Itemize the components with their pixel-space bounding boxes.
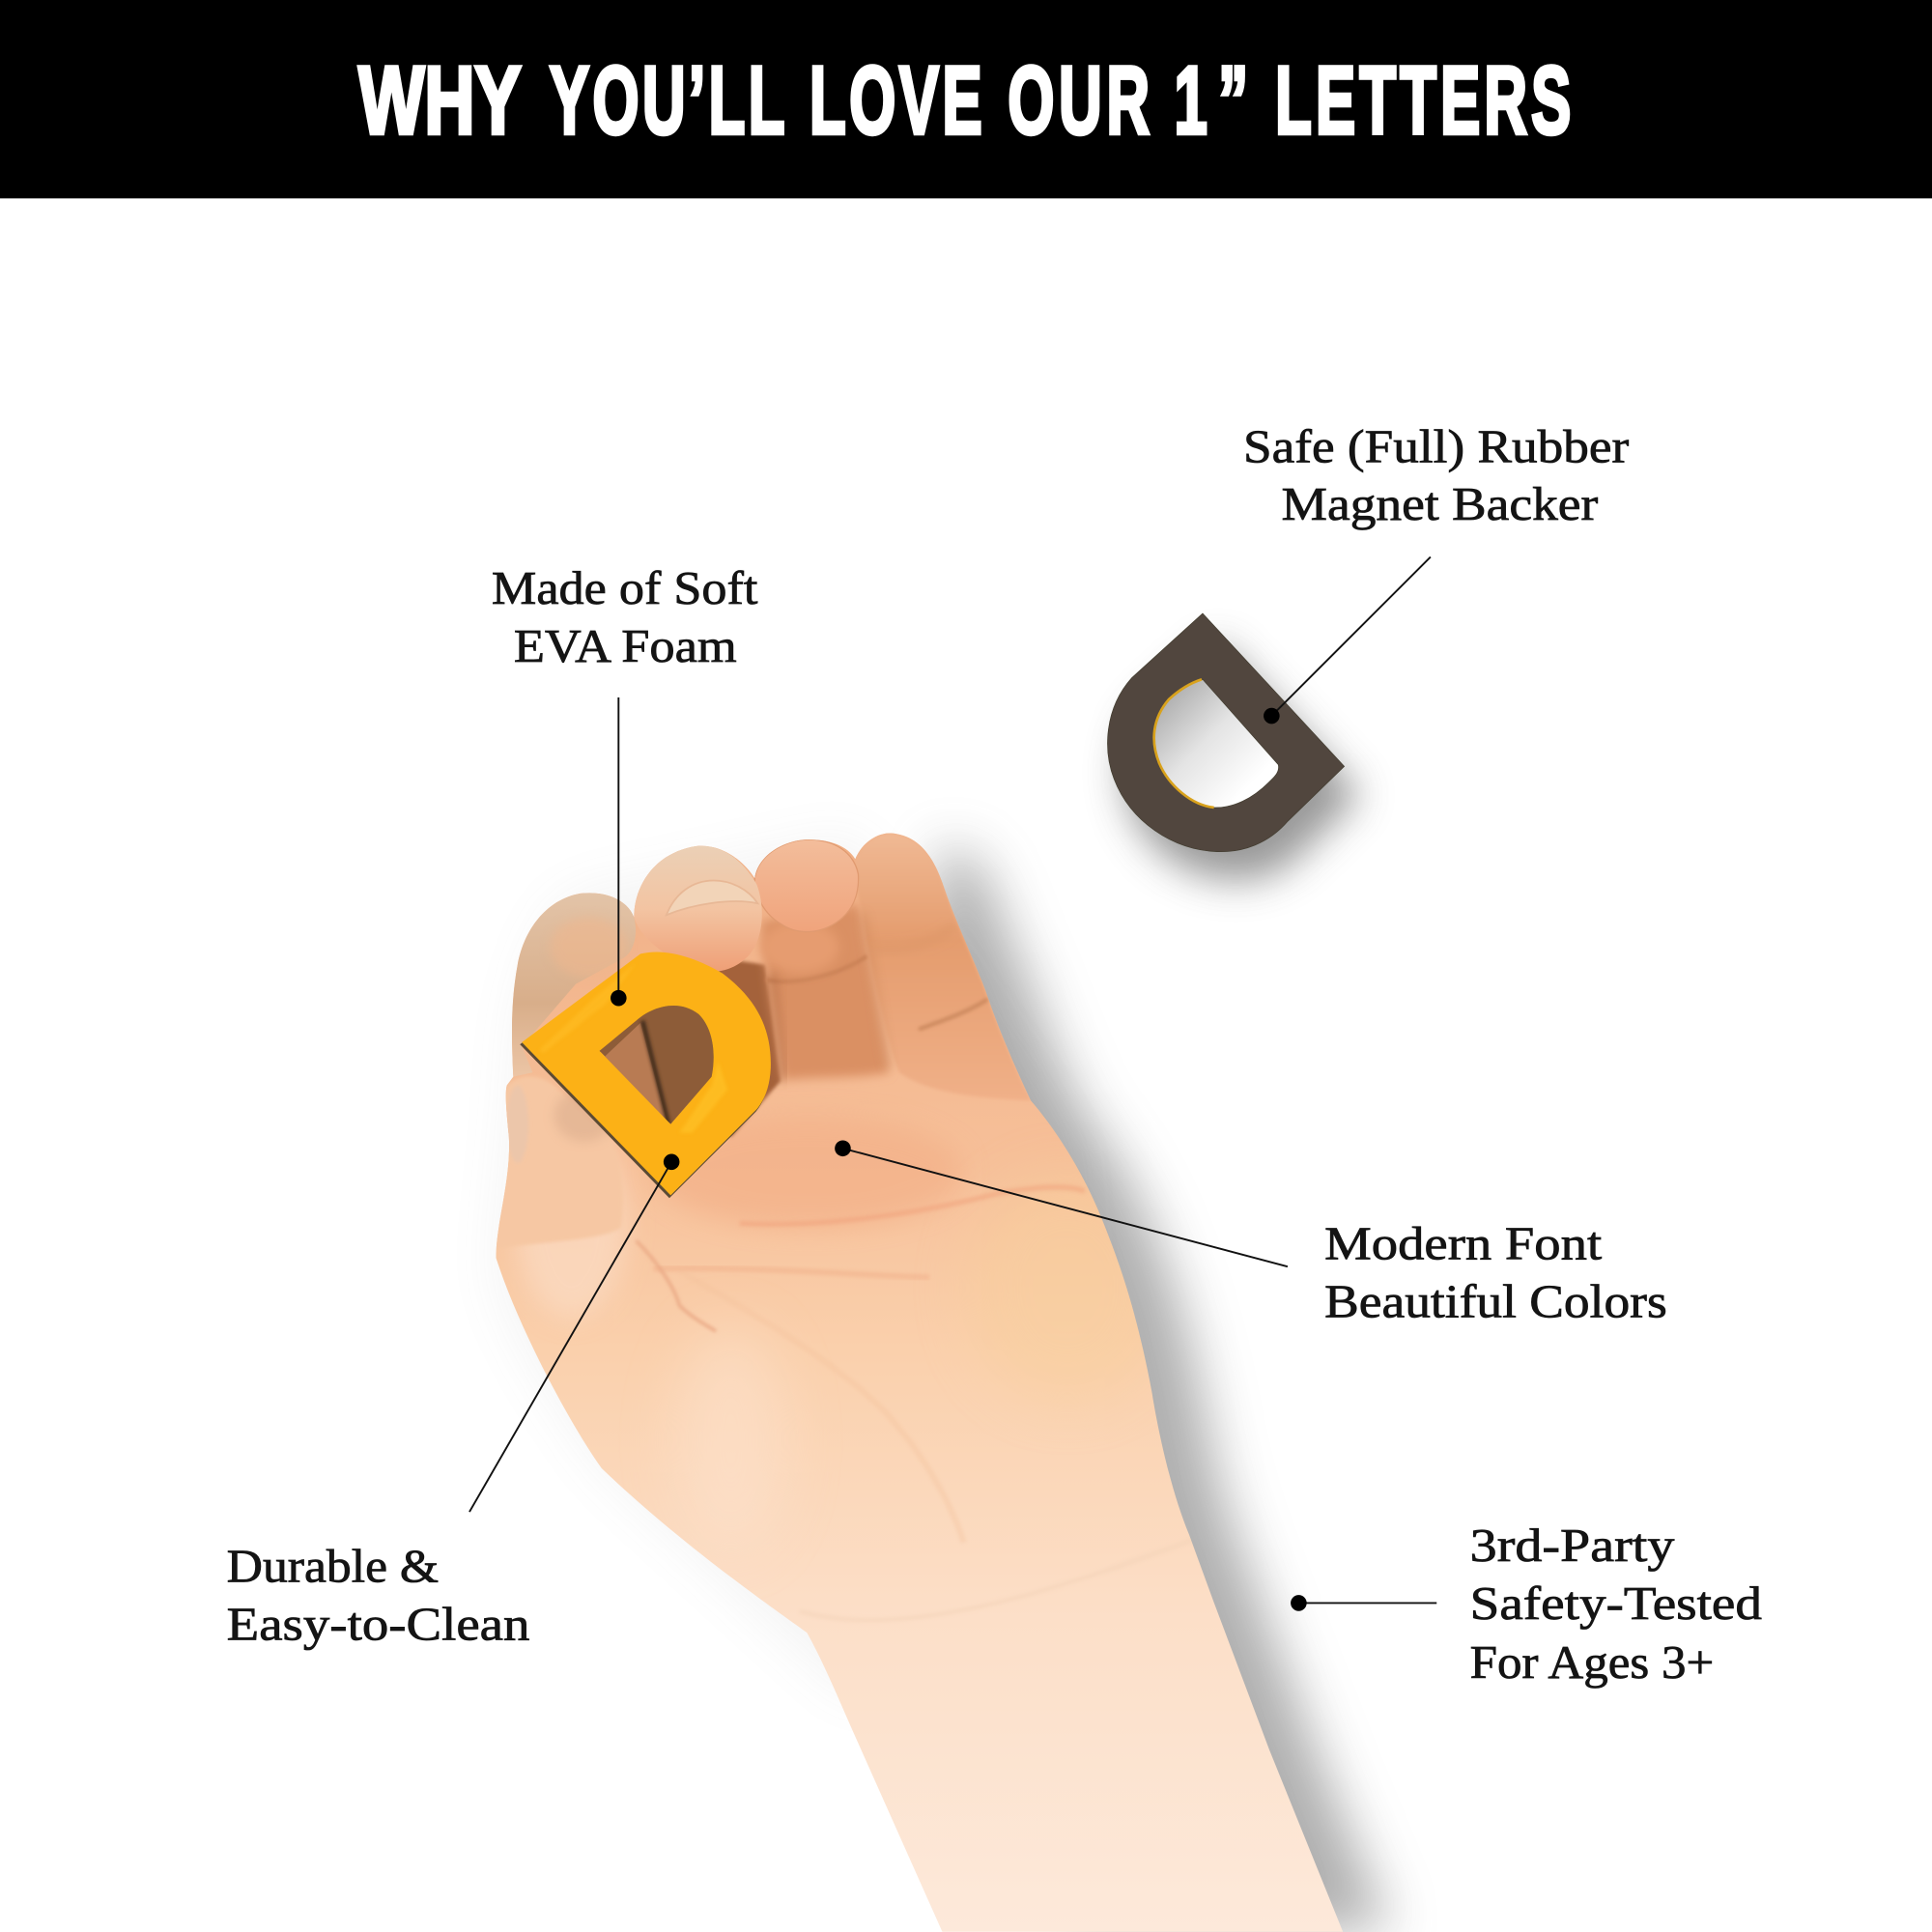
callout: modern font: Beautiful Colors [1324, 1277, 1667, 1328]
letter body [1108, 613, 1345, 852]
title: YOU’LL [550, 46, 784, 154]
third finger base [761, 904, 889, 1080]
brown magnet letter [1108, 613, 1360, 881]
second finger with nail [634, 846, 762, 972]
callout: durable: Easy-to-Clean [227, 1600, 529, 1651]
callout: soft foam: Made of Soft [492, 563, 758, 614]
callout: rubber magnet backer [1243, 421, 1629, 724]
callout: durable [227, 1154, 679, 1651]
title: OUR [1008, 46, 1150, 154]
palm and wrist [464, 813, 1369, 1932]
title: LOVE [810, 46, 982, 154]
callout: durable: Durable & [227, 1542, 439, 1593]
callout: safety tested: For Ages 3+ [1470, 1637, 1714, 1689]
callout: soft foam: EVA Foam [514, 621, 737, 672]
wrist creases [800, 1538, 1197, 1620]
callout: safety tested [1291, 1520, 1762, 1689]
callout: soft foam [492, 563, 758, 1006]
title [358, 46, 1571, 154]
hand holding yellow letter [464, 813, 1390, 1932]
yellow letter [521, 952, 771, 1198]
lower finger [490, 1076, 623, 1249]
callout: rubber magnet backer: Magnet Backer [1282, 479, 1598, 530]
dark recess beside letter [691, 960, 782, 1138]
callout: safety tested: 3rd-Party [1470, 1520, 1675, 1572]
title: LETTERS [1275, 46, 1571, 154]
callout: rubber magnet backer: Safe (Full) Rubber [1243, 421, 1629, 472]
pinky finger [855, 833, 1031, 1100]
index finger [512, 893, 636, 1077]
third finger tip [754, 839, 859, 932]
yellow edge [1154, 679, 1214, 808]
callout: modern font: Modern Font [1324, 1219, 1603, 1270]
title: 1” [1175, 46, 1248, 154]
letter hole [1153, 679, 1279, 808]
callout: modern font [835, 1140, 1667, 1328]
palm creases [740, 1187, 1085, 1224]
callout: safety tested: Safety-Tested [1470, 1578, 1762, 1630]
hand cast shadow [624, 829, 1406, 1932]
letter hole backdrop [600, 1006, 714, 1124]
title: WHY [358, 46, 522, 154]
letter shadow [1123, 642, 1360, 881]
header bar [0, 0, 1932, 198]
